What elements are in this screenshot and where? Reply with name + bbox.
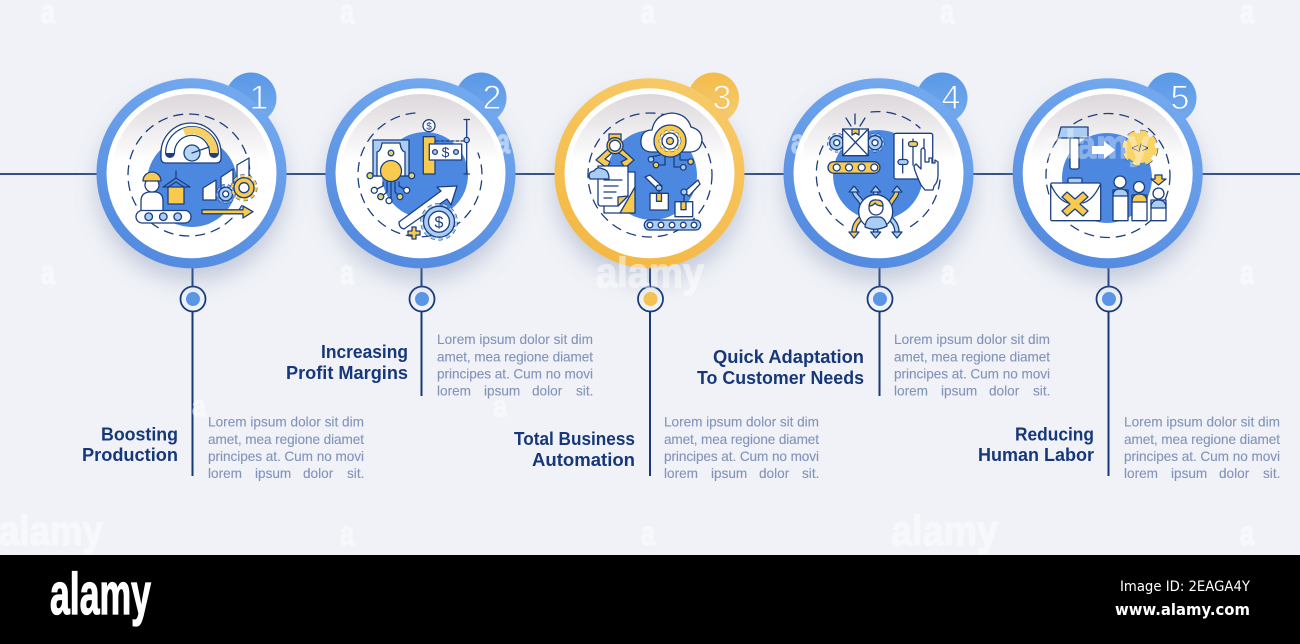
body 4: sit. [1033,384,1050,398]
icon: profit margins: $ [435,214,444,232]
ring 4 [784,78,974,268]
horizontal timeline [0,173,1300,175]
node 5 [1096,286,1122,312]
body 1: sit. [347,466,364,481]
body 2: principes at. Cum no movi [437,366,593,382]
body 5: sit. [1263,466,1280,481]
body 2: amet, mea regione diamet [437,350,593,364]
body 4: principes at. Cum no movi [894,366,1050,382]
body 4: ipsum [941,384,977,398]
body 3: principes at. Cum no movi [664,449,819,464]
node 1 [180,286,206,312]
watermarks: alamy [1045,123,1150,167]
heading 3 [514,429,635,470]
body 1: Lorem ipsum dolor sit dim [208,414,364,430]
body 1: amet, mea regione diamet [208,432,364,447]
icon: reducing human labor: </> [1131,141,1149,155]
text block 3 [514,414,819,481]
text block 4 [697,332,1050,398]
heading 3: Automation [532,450,635,470]
watermarks: a [791,123,806,161]
body 5: dolor [1219,466,1250,481]
heading 1: Boosting [101,424,178,444]
watermarks: a [493,390,507,423]
watermarks: a [192,390,206,423]
icon: customer adaptation [816,112,940,238]
heading 4: Quick Adaptation [713,347,864,367]
text block 1 [82,414,364,481]
website: www.alamy.com [1115,600,1250,619]
watermarks: a [1240,254,1255,292]
body 2: sit. [576,384,593,398]
body 1 [208,414,364,481]
heading 4 [697,347,864,388]
heading 1: Production [82,445,178,465]
badge number 2: 2 [483,79,501,117]
heading 5 [978,424,1094,465]
ring 2 [326,78,516,268]
body 1: lorem [208,466,242,481]
node 3 [638,286,663,312]
badge number 5: 5 [1171,79,1189,117]
node 4 [868,286,892,312]
heading 5: Reducing [1015,424,1094,444]
body 5: ipsum [1171,466,1207,481]
icon: factory production [128,114,256,236]
step 3 [554,72,744,476]
ring 1 [96,78,286,268]
heading 2: Profit Margins [286,363,408,383]
step 1 [96,72,286,476]
heading 2 [286,342,408,383]
icon: profit margins [358,113,482,239]
ring 5 [1013,78,1203,268]
connector 4 [878,262,880,396]
watermarks: alamy [596,249,705,296]
step 2 [326,72,516,396]
ring 3 [554,78,744,268]
watermarks: a [1240,515,1255,553]
icon: profit margins: $ [442,144,450,160]
body 3: Lorem ipsum dolor sit dim [664,414,819,430]
heading 3: Total Business [514,429,635,449]
badge number 4: 4 [942,79,960,117]
watermarks: a [340,515,355,553]
body 1: ipsum [255,466,291,481]
text block 5 [978,414,1280,481]
body 2: dolor [532,384,563,398]
badge 1 [226,72,276,124]
body 3 [664,414,819,481]
body 1: dolor [303,466,334,481]
watermarks: a [496,123,511,161]
body 5: lorem [1124,466,1158,481]
heading 2: Increasing [321,342,408,362]
body 3: sit. [802,466,819,481]
icon: reducing human labor [1046,114,1170,238]
body 4: dolor [989,384,1020,398]
badge number 3: 3 [713,79,731,117]
body 2: ipsum [484,384,520,398]
body 2: Lorem ipsum dolor sit dim [437,332,593,347]
icon: business automation [588,113,712,237]
connector 1 [192,262,194,476]
body 4: amet, mea regione diamet [894,350,1050,364]
body 3: amet, mea regione diamet [664,432,819,447]
body 4: Lorem ipsum dolor sit dim [894,332,1050,347]
step 4 [784,72,974,396]
node 2 [410,286,434,312]
body 2: lorem [437,384,471,398]
heading 5: Human Labor [978,445,1094,465]
body 3: dolor [759,466,790,481]
body 4: lorem [894,384,928,398]
watermarks: a [41,254,56,292]
footer logo: alamy [50,562,151,627]
step 5 [1013,72,1203,476]
text block 2 [286,332,593,398]
image id: Image ID: 2EAGA4Y [1120,579,1250,595]
body 5: Lorem ipsum dolor sit dim [1124,414,1280,430]
watermarks: a [340,254,355,292]
badge 3 [688,72,739,124]
body 4 [894,332,1050,398]
watermarks: a [941,254,956,292]
connector 2 [420,262,422,396]
body 1: principes at. Cum no movi [208,449,364,464]
badge 5 [1146,72,1196,124]
icon: profit margins: $ [426,122,432,132]
body 5 [1124,414,1280,481]
heading 4: To Customer Needs [697,368,864,388]
body 5: amet, mea regione diamet [1124,432,1280,447]
badge 4 [916,72,968,124]
body 3: lorem [664,466,698,481]
connector 3 [649,262,651,476]
watermarks: a [641,515,656,553]
badge 2 [456,72,506,124]
footer bar [0,555,1300,644]
watermarks: alamy [891,507,999,554]
watermarks: alamy [0,507,104,554]
connector 5 [1108,262,1110,476]
badge number 1: 1 [250,79,268,117]
body 2 [437,332,593,398]
body 5: principes at. Cum no movi [1124,449,1280,464]
heading 1 [82,424,178,465]
body 3: ipsum [711,466,747,481]
